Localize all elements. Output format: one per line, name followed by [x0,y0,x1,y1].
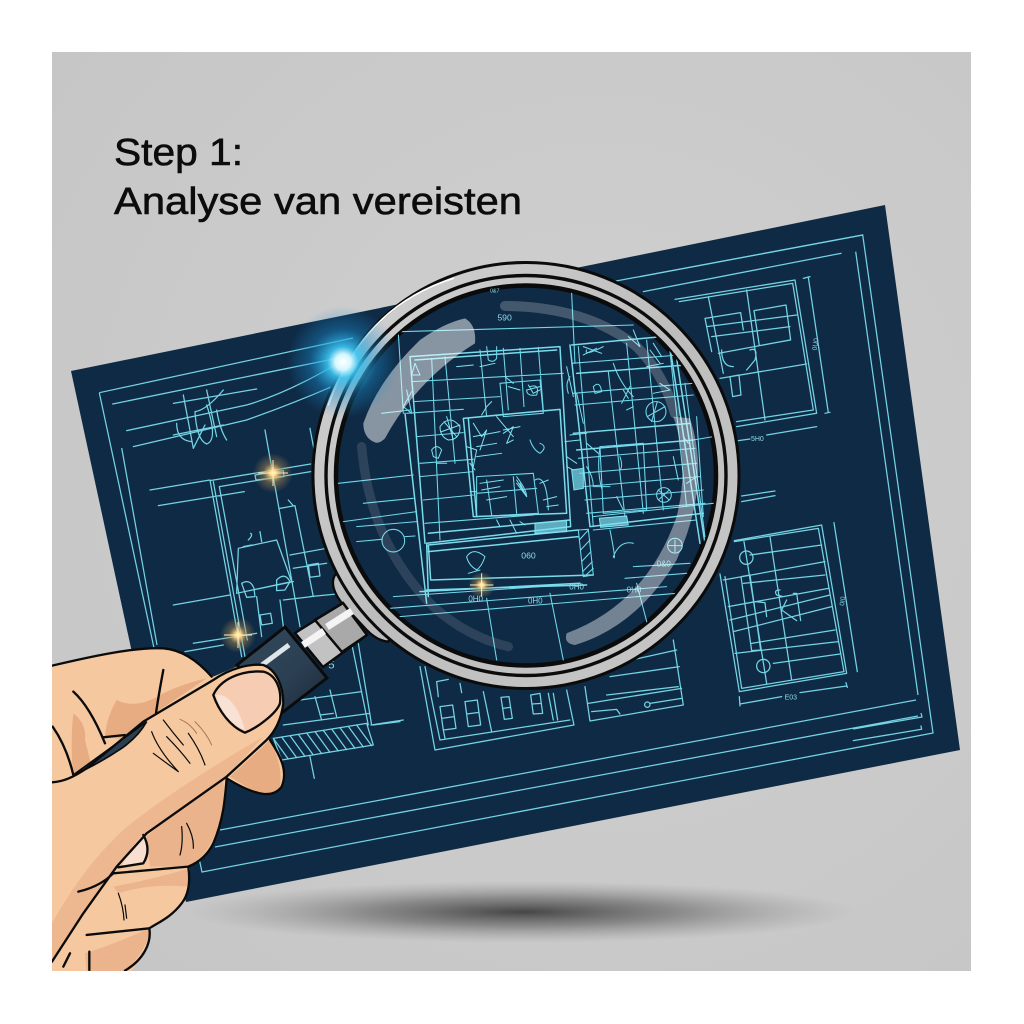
left side drawing lines [113,358,337,657]
floor shadow [187,881,857,943]
nail [213,671,280,733]
sheet border frames [99,235,933,872]
thumb [238,666,282,736]
bottom right drawing lines: 0I0 [839,596,847,606]
ring highlight [328,278,453,405]
magnified floor plan: 0H0 [528,596,543,605]
handle grip [237,627,327,712]
hand holding magnifier [47,648,284,975]
magnified floor plan: 0H0 [627,586,642,595]
handle ferrule [295,603,367,667]
fingernail lower [122,836,146,866]
bottom right drawing lines [720,523,922,741]
skin creases [118,720,205,920]
glow: gold sparkle left [253,453,293,493]
blueprint sheet [71,205,960,902]
bottom right drawing lines: E03 [785,694,797,701]
magnified floor plan [338,289,713,660]
magnified floor plan: 0H0 [569,582,585,591]
glow: blue sparkle [287,306,399,418]
gold sparkle in lens [469,572,494,598]
top right drawing lines: 5H0 [751,436,764,443]
glass reflections [362,306,698,647]
top right drawing lines [640,235,863,502]
thumb shadow [52,737,263,962]
magnified floor plan: 0&0 [657,560,671,569]
magnified floor plan: 060 [521,550,536,560]
hatched wall lower left: 5 [328,659,335,671]
title: Step 1: [114,132,243,174]
bottom middle drawing lines [371,640,683,750]
nail shine [216,695,245,730]
title: Analyse van vereisten [114,181,522,223]
handle collar [333,567,400,642]
lens background [336,286,716,666]
ring inner line [326,276,726,676]
magnified floor plan: 0&7 [490,289,499,295]
hand base [47,648,284,975]
glow: gold sparkle lower [220,617,256,653]
top right drawing lines: 0U0 [812,338,820,351]
gap between fingers [73,722,147,775]
hatched wall lower left [273,643,400,778]
finger shadows [72,678,281,794]
magnified floor plan: 590 [497,313,512,323]
grip highlight [262,645,289,665]
hatched blocks [535,468,628,533]
hand outlines [52,648,284,971]
sheet background [71,205,960,902]
faint creases [180,719,212,745]
lens content [328,278,713,660]
magnifying glass [237,262,739,712]
metal ring [313,262,739,688]
magnified floor plan: 0H0 [468,595,484,604]
